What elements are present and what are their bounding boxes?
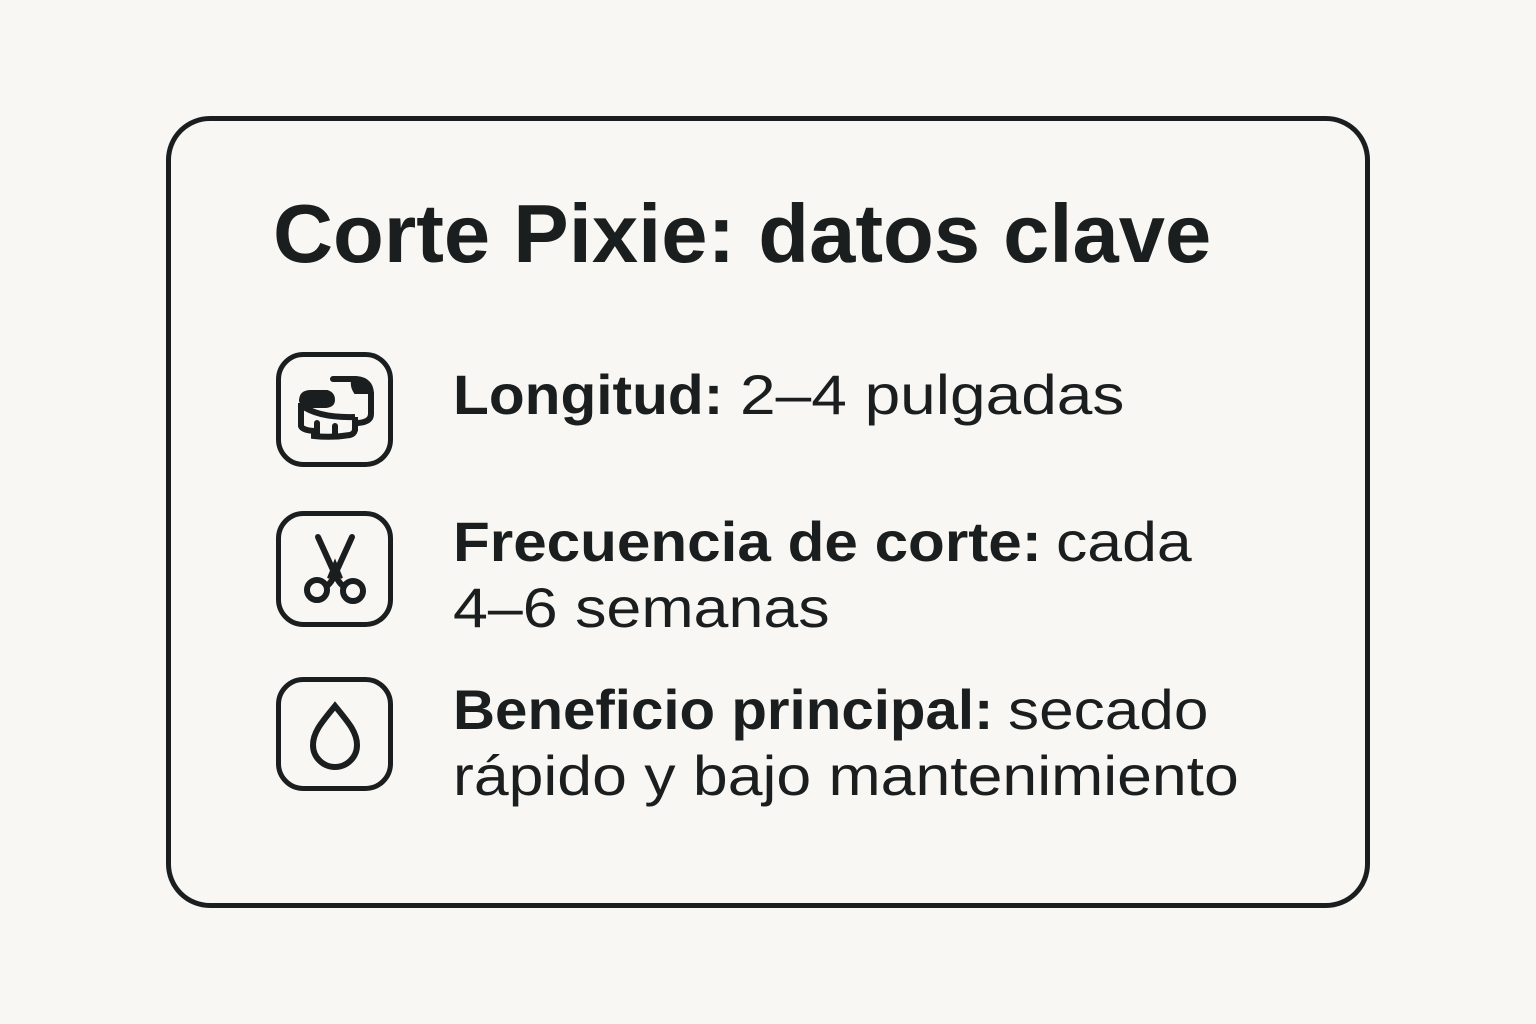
- text: main benefit: [453, 678, 1239, 807]
- text: cutting frequency: [453, 510, 1192, 639]
- text: length: 2–4 pulgadas: [740, 363, 1124, 426]
- title: Corte Pixie: datos clave: [273, 187, 1211, 280]
- text: length: [453, 363, 1124, 426]
- text: cutting frequency: Frecuencia de corte:: [453, 510, 1042, 573]
- text: main benefit: Beneficio principal:: [453, 678, 993, 741]
- text: main benefit: rápido y bajo mantenimiento: [453, 744, 1239, 807]
- text: length: Longitud:: [453, 363, 723, 426]
- text: cutting frequency: cada: [1056, 510, 1192, 573]
- text: cutting frequency: 4–6 semanas: [453, 576, 830, 639]
- panel: key facts card: [166, 116, 1370, 908]
- text: main benefit: secado: [1008, 678, 1208, 741]
